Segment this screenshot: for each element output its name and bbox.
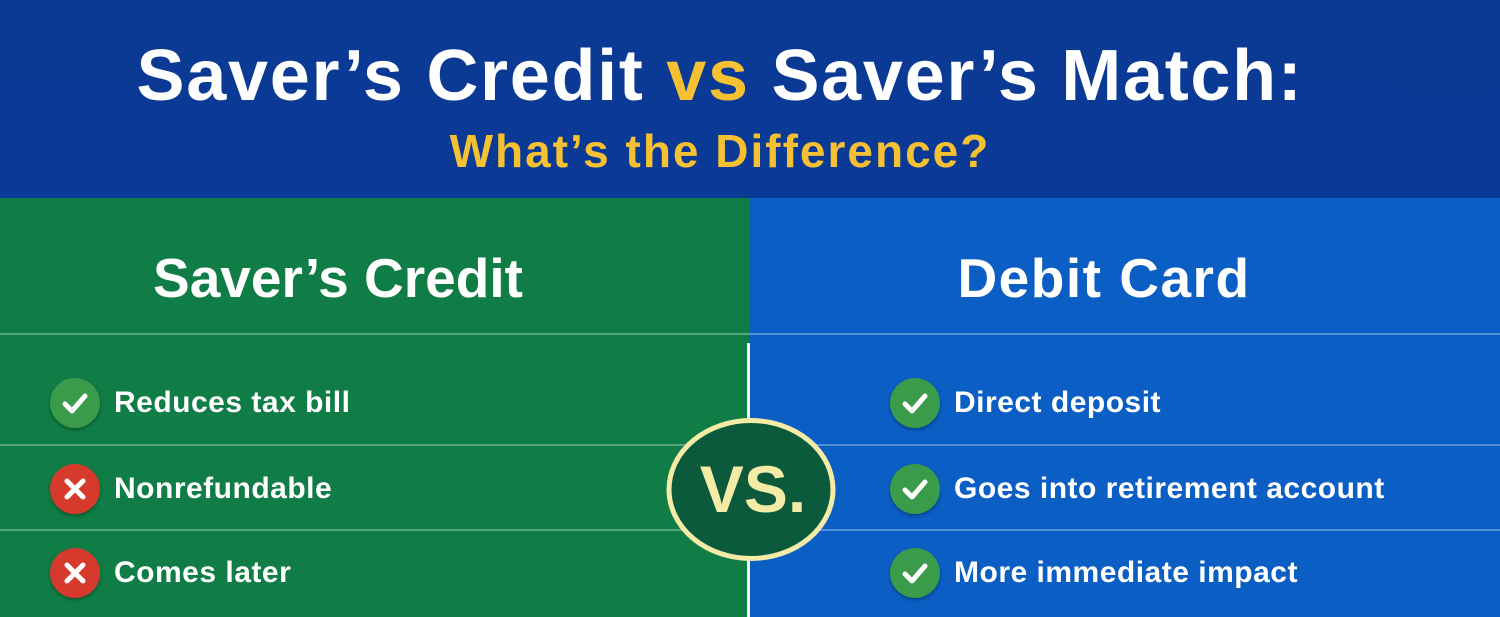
vs badge <box>666 418 836 561</box>
item: direct deposit <box>888 378 1161 432</box>
item: immediate impact: More immediate impact <box>954 556 1298 589</box>
item: direct deposit: Direct deposit <box>954 386 1161 419</box>
vs badge: VS. <box>700 452 806 526</box>
header banner <box>0 0 1500 198</box>
item: comes later: Comes later <box>114 556 291 589</box>
panel: saver's credit <box>0 198 749 617</box>
item: nonrefundable: Nonrefundable <box>114 472 332 505</box>
panel: debit card <box>749 198 1500 617</box>
heading left: Saver’s Credit <box>153 247 523 309</box>
item: retirement account <box>888 464 1385 518</box>
heading right: Debit Card <box>957 247 1251 309</box>
item: reduces tax bill: Reduces tax bill <box>114 386 350 419</box>
item: retirement account: Goes into retirement account <box>954 472 1385 505</box>
item: reduces tax bill <box>49 378 350 431</box>
subtitle: What’s the Difference? <box>450 125 990 177</box>
item: nonrefundable <box>49 464 332 517</box>
item: immediate impact <box>888 548 1298 602</box>
title: Saver’s Credit vs Saver’s Match: <box>136 36 1303 116</box>
item: comes later <box>49 548 291 601</box>
